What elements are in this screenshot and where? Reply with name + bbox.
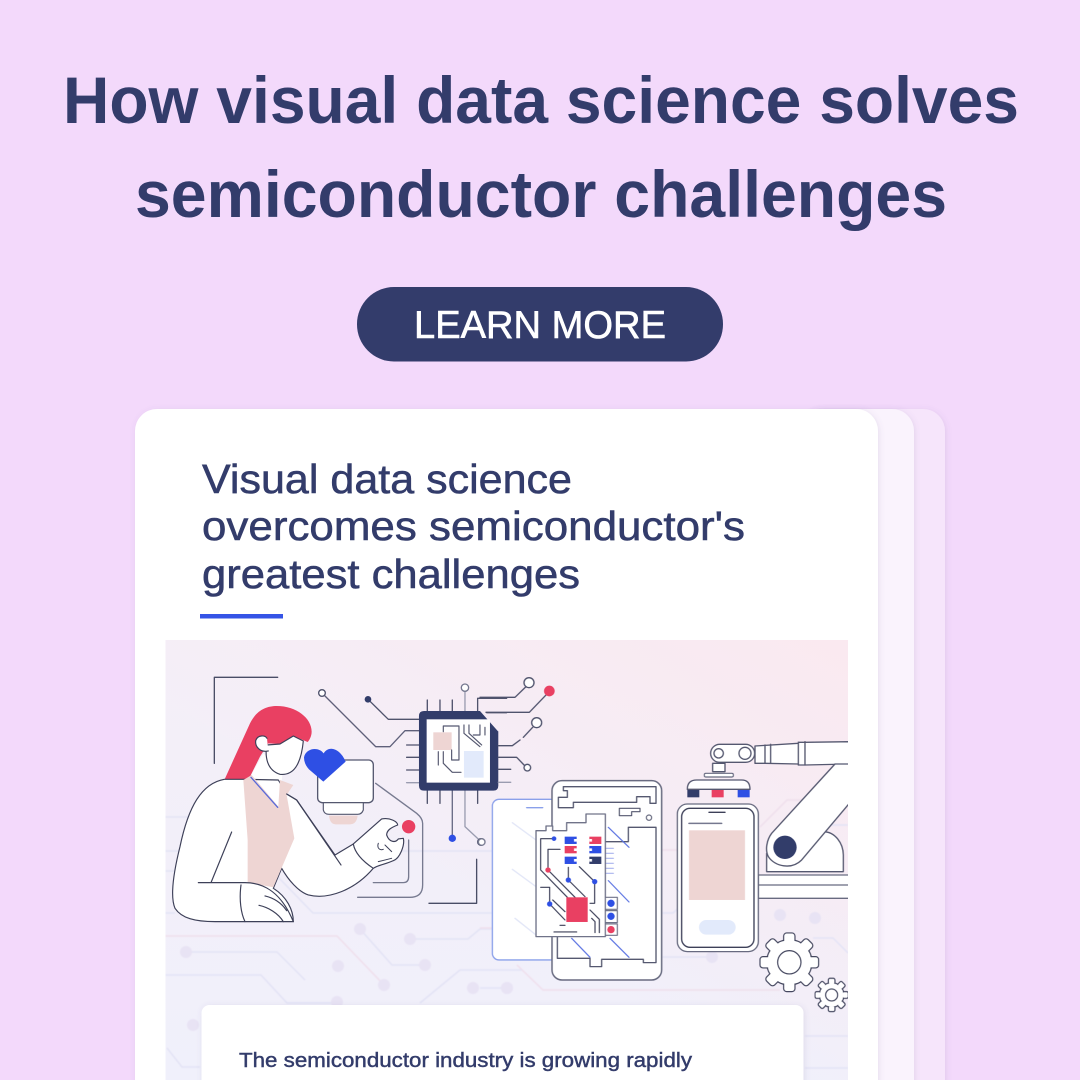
board components [565,837,601,864]
icon: red button [402,820,415,833]
text panel heading: The semiconductor industry is growing rapidly [239,1049,693,1072]
title: How visual data science solves [63,63,1019,137]
icon: red node [544,686,555,696]
icon: chip connector lines, right side [478,678,547,845]
back card [800,409,945,1080]
hand [353,819,404,868]
phone with pink card [677,804,758,952]
illustration panel [165,640,855,1080]
coat details [198,794,341,922]
card heading: overcomes semiconductor's [202,503,745,549]
title: semiconductor challenges [135,157,947,231]
neck [252,754,282,781]
front card [135,409,878,1080]
icon: chip connector lines, left side [319,684,507,845]
face [266,736,303,774]
vest [243,775,294,887]
illustration: scientist and chip [173,677,507,922]
board traces [541,839,599,933]
card heading: greatest challenges [202,551,580,597]
button: learn more [357,287,723,362]
icon: microchip [419,711,498,791]
text panel [202,1005,804,1080]
card heading [202,456,745,597]
icon: robot arm [687,742,855,898]
title [63,63,1019,231]
pen [251,777,278,807]
blue outlined screen [492,799,566,960]
icon: large gear [760,933,819,992]
illustration: phones and robot arm [478,678,855,1012]
icon: microscope [304,749,373,824]
button: learn more: LEARN MORE [414,304,666,347]
phone with circuit board [552,781,662,980]
middle card [800,409,914,1080]
hair [224,706,312,780]
icon: corner brackets [214,677,477,903]
card heading: Visual data science [202,456,572,502]
icon: microscope circuit lines [358,783,423,897]
icon: connector dots [365,696,456,842]
circuit board module [536,814,617,937]
person: scientist [173,706,404,922]
lab coat body [173,779,373,922]
icon: small gear [815,978,848,1012]
background circuit traces [165,800,848,1068]
heading underline [200,614,283,618]
board connectors [605,897,617,935]
